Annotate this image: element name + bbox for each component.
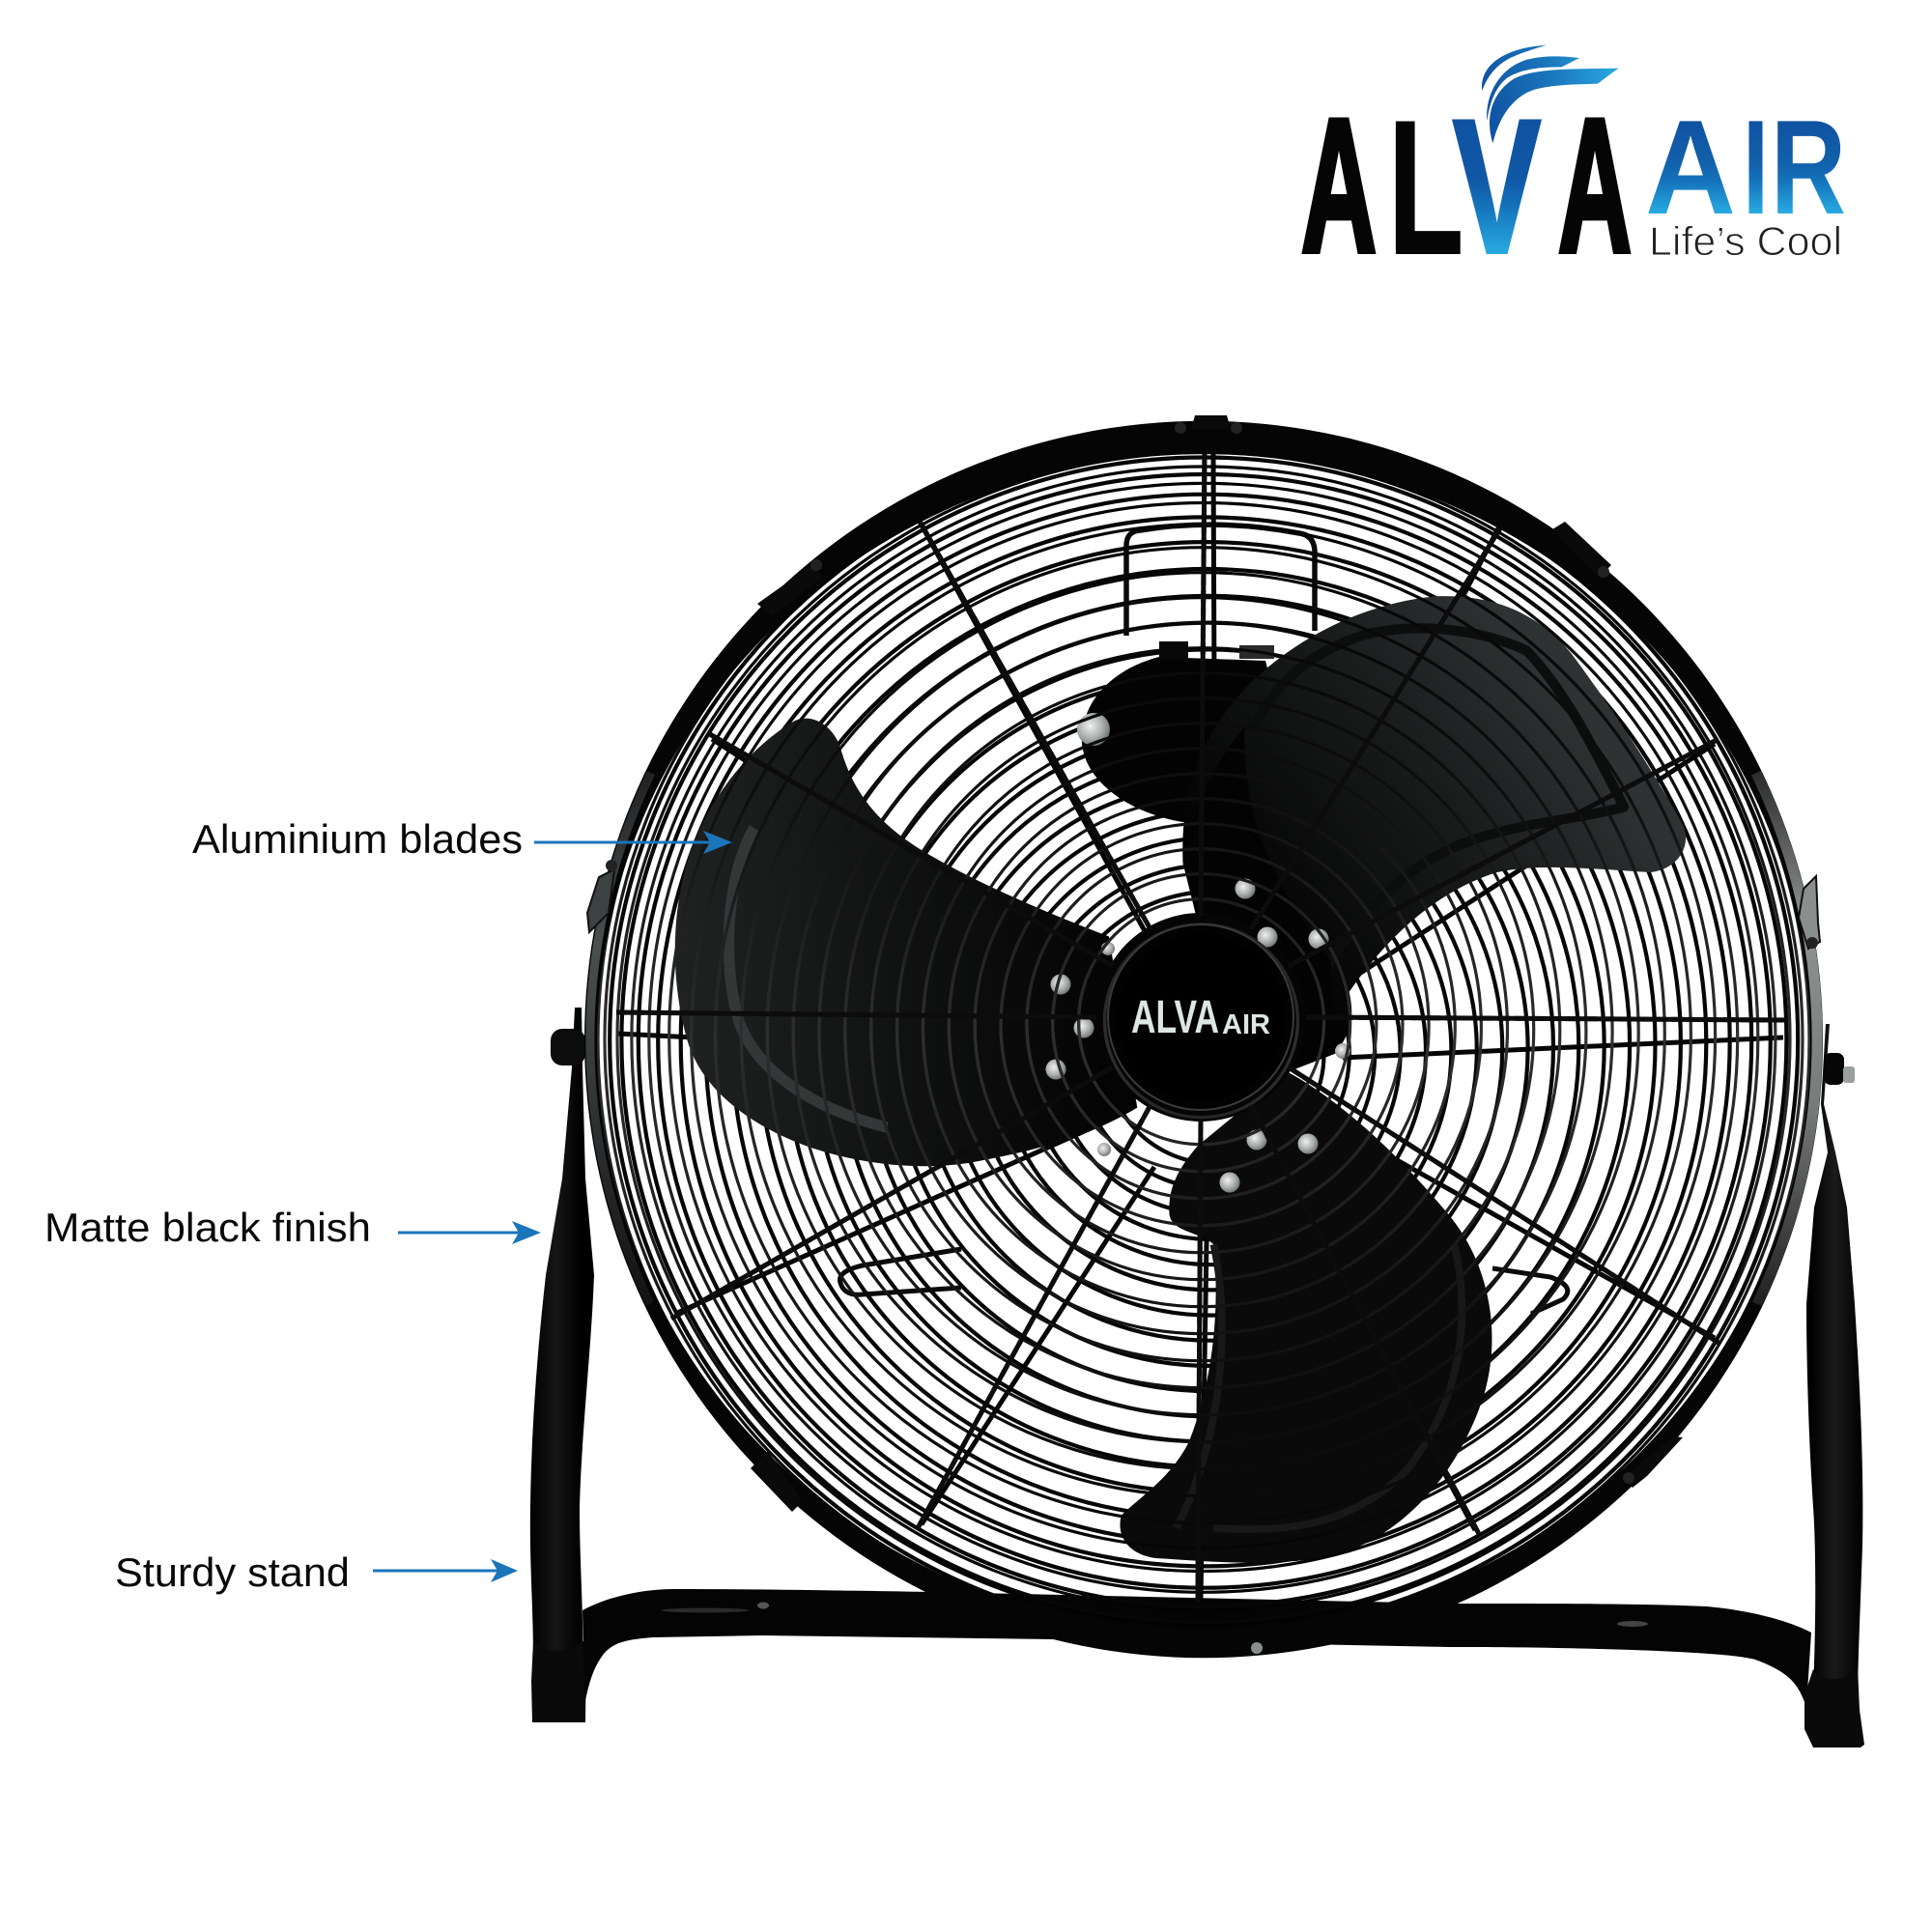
arrow bbox=[398, 1221, 541, 1244]
lower right wire foot bbox=[1492, 1268, 1568, 1314]
logo wordmark AIR bbox=[1645, 93, 1846, 242]
left rim highlight bbox=[590, 773, 651, 1304]
crossbar highlights bbox=[662, 1602, 1648, 1627]
front grille rings bbox=[598, 435, 1809, 1646]
label: Aluminium blades bbox=[192, 816, 523, 862]
front spoke highlights bbox=[616, 449, 1787, 1602]
rear grille rings bbox=[610, 445, 1798, 1634]
rear grille spokes bbox=[618, 454, 1783, 1599]
logo wordmark ALVA: A bbox=[1301, 79, 1377, 292]
callout: Matte black finish bbox=[44, 1205, 541, 1250]
front rings highlighted over bottom blade bbox=[1121, 1083, 1486, 1561]
callout: Sturdy stand bbox=[115, 1549, 518, 1595]
logo wordmark ALVA bbox=[1301, 79, 1632, 294]
motor screw bbox=[1077, 713, 1110, 746]
label: Matte black finish bbox=[44, 1205, 371, 1250]
blade: bottom bbox=[1120, 1072, 1492, 1563]
left stand arm bbox=[530, 1008, 594, 1662]
stand bbox=[530, 1008, 1864, 1747]
right rim highlight bbox=[1756, 773, 1817, 1304]
hub logo text: ALVA bbox=[1131, 992, 1219, 1043]
lower left wire foot bbox=[839, 1249, 961, 1294]
blade rivets bbox=[1045, 879, 1350, 1192]
logo tagline: Life’s Cool bbox=[1649, 218, 1842, 264]
logo wordmark ALVA: L bbox=[1388, 81, 1463, 294]
label: Sturdy stand bbox=[115, 1549, 350, 1595]
blade: top right bbox=[1182, 596, 1686, 1072]
wire carry handle bbox=[1126, 525, 1315, 636]
logo wordmark ALVA: V bbox=[1453, 80, 1541, 293]
rim clips bbox=[587, 415, 1820, 1654]
callout: Aluminium blades bbox=[192, 816, 732, 862]
right foot bbox=[1804, 1666, 1864, 1747]
motor housing bbox=[1077, 641, 1285, 825]
blades bbox=[675, 596, 1686, 1563]
hub back plate bbox=[1096, 913, 1305, 1122]
logo swoosh feathers bbox=[1482, 45, 1619, 143]
front rings highlighted over left blade bbox=[674, 750, 1130, 1167]
crossbar bbox=[582, 1589, 1811, 1707]
logo wordmark AIR: R bbox=[1771, 93, 1846, 242]
hub logo text: AIR bbox=[1222, 1009, 1270, 1040]
logo wordmark AIR: A bbox=[1645, 93, 1736, 242]
blade: left bbox=[675, 719, 1137, 1166]
front grille spokes bbox=[616, 449, 1787, 1602]
left foot bbox=[531, 1640, 586, 1722]
right pivot knob and bolt bbox=[1824, 1053, 1855, 1085]
left pivot knob bbox=[551, 1029, 585, 1065]
logo: AlvaAir bbox=[1301, 45, 1846, 294]
logo wordmark AIR: I bbox=[1743, 93, 1769, 242]
right stand arm bbox=[1806, 1024, 1862, 1690]
logo wordmark ALVA: A bbox=[1558, 79, 1632, 292]
arrow bbox=[534, 831, 732, 854]
fan product illustration bbox=[530, 415, 1864, 1747]
hub cap bbox=[1108, 924, 1293, 1110]
outer rim bbox=[584, 421, 1823, 1658]
arrow bbox=[373, 1559, 518, 1582]
